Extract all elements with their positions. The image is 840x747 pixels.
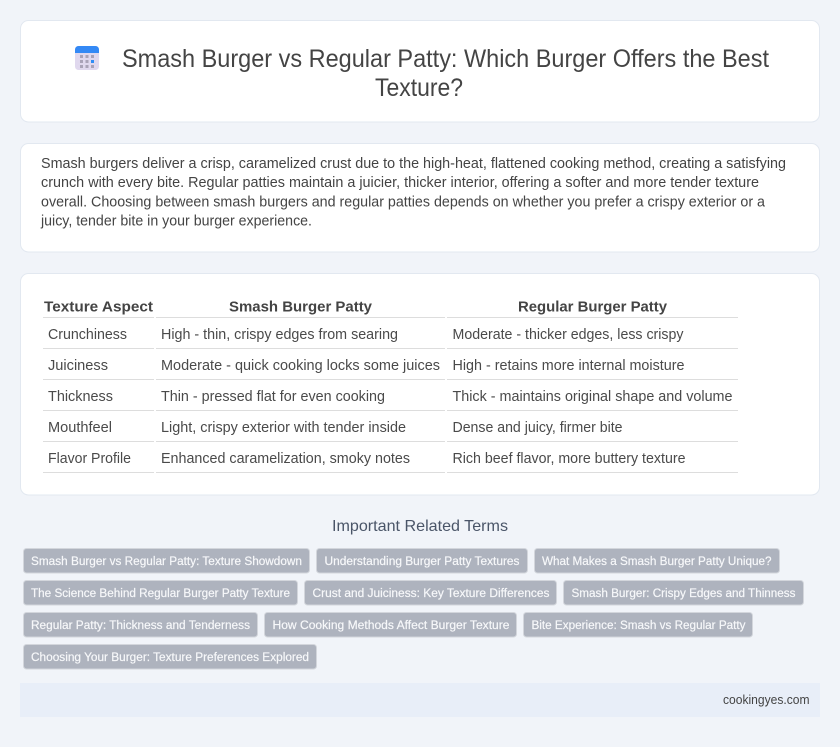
title: Texture? bbox=[375, 74, 463, 102]
panel: comparison table bbox=[20, 274, 820, 495]
row: juiciness: Moderate - quick cooking locks some juices bbox=[161, 358, 440, 374]
row: mouthfeel bbox=[48, 420, 622, 436]
tag bbox=[524, 612, 752, 637]
row: thickness: Thickness bbox=[48, 389, 113, 405]
panel: summary bbox=[20, 144, 820, 252]
tag: Smash Burger: Crispy Edges and Thinness bbox=[572, 586, 796, 600]
row: juiciness: Juiciness bbox=[48, 358, 108, 374]
footer: cookingyes.com bbox=[723, 693, 810, 707]
row: thickness: Thin - pressed flat for even cooking bbox=[161, 389, 385, 405]
summary paragraph: overall. Choosing between smash burgers and regular patties depends on whether you prefer a crispy exterior or a bbox=[41, 194, 766, 210]
tag bbox=[24, 612, 258, 637]
row: juiciness: High - retains more internal moisture bbox=[452, 358, 684, 374]
row: flavor profile: Rich beef flavor, more buttery texture bbox=[452, 451, 686, 467]
tag bbox=[264, 612, 516, 637]
tag bbox=[24, 580, 298, 605]
summary paragraph: Smash burgers deliver a crisp, caramelized crust due to the high-heat, flattened cooking method, creating a satisfying bbox=[41, 156, 786, 172]
row: mouthfeel: Light, crispy exterior with tender inside bbox=[161, 420, 406, 436]
tag: Understanding Burger Patty Textures bbox=[324, 554, 520, 568]
summary paragraph bbox=[40, 156, 786, 230]
tag group bbox=[24, 548, 804, 669]
tag bbox=[24, 644, 316, 669]
table header row bbox=[44, 298, 668, 316]
tag bbox=[304, 580, 556, 605]
panel: title header bbox=[20, 20, 820, 122]
row: crunchiness: Crunchiness bbox=[48, 327, 127, 343]
tag bbox=[564, 580, 804, 605]
title: Smash Burger vs Regular Patty: Which Burger Offers the Best bbox=[122, 45, 769, 73]
table header row: Smash Burger Patty bbox=[229, 298, 373, 316]
tag: Regular Patty: Thickness and Tenderness bbox=[31, 618, 250, 632]
row: crunchiness: Moderate - thicker edges, less crispy bbox=[452, 327, 684, 343]
table header row: Regular Burger Patty bbox=[518, 298, 668, 316]
icon: calendar bbox=[75, 46, 99, 70]
tag: What Makes a Smash Burger Patty Unique? bbox=[542, 554, 772, 568]
tag bbox=[316, 548, 528, 573]
row: crunchiness bbox=[48, 327, 684, 343]
row: flavor profile bbox=[48, 451, 686, 467]
summary paragraph: crunch with every bite. Regular patties maintain a juicier, thicker interior, offering a softer and more tender texture bbox=[41, 175, 759, 191]
tag: Bite Experience: Smash vs Regular Patty bbox=[532, 618, 746, 632]
tag: Crust and Juiciness: Key Texture Differences bbox=[312, 586, 550, 600]
row: mouthfeel: Mouthfeel bbox=[48, 420, 112, 436]
tag bbox=[24, 548, 310, 573]
tag: The Science Behind Regular Burger Patty Texture bbox=[31, 586, 290, 600]
row: mouthfeel: Dense and juicy, firmer bite bbox=[452, 420, 622, 436]
row: flavor profile: Enhanced caramelization, smoky notes bbox=[161, 451, 410, 467]
row: crunchiness: High - thin, crispy edges from searing bbox=[161, 327, 398, 343]
row: thickness bbox=[48, 389, 732, 405]
tag: Smash Burger vs Regular Patty: Texture Showdown bbox=[31, 554, 302, 568]
tag: Choosing Your Burger: Texture Preferences Explored bbox=[31, 650, 309, 664]
summary paragraph: juicy, tender bite in your burger experience. bbox=[40, 214, 312, 230]
footer bbox=[20, 683, 820, 717]
tag bbox=[534, 548, 780, 573]
row: flavor profile: Flavor Profile bbox=[48, 451, 131, 467]
title bbox=[122, 45, 769, 102]
table header row: Texture Aspect bbox=[44, 298, 153, 316]
tag: How Cooking Methods Affect Burger Texture bbox=[272, 618, 510, 632]
row: juiciness bbox=[48, 358, 684, 374]
row: thickness: Thick - maintains original shape and volume bbox=[452, 389, 732, 405]
heading: important related terms: Important Related Terms bbox=[332, 518, 508, 535]
